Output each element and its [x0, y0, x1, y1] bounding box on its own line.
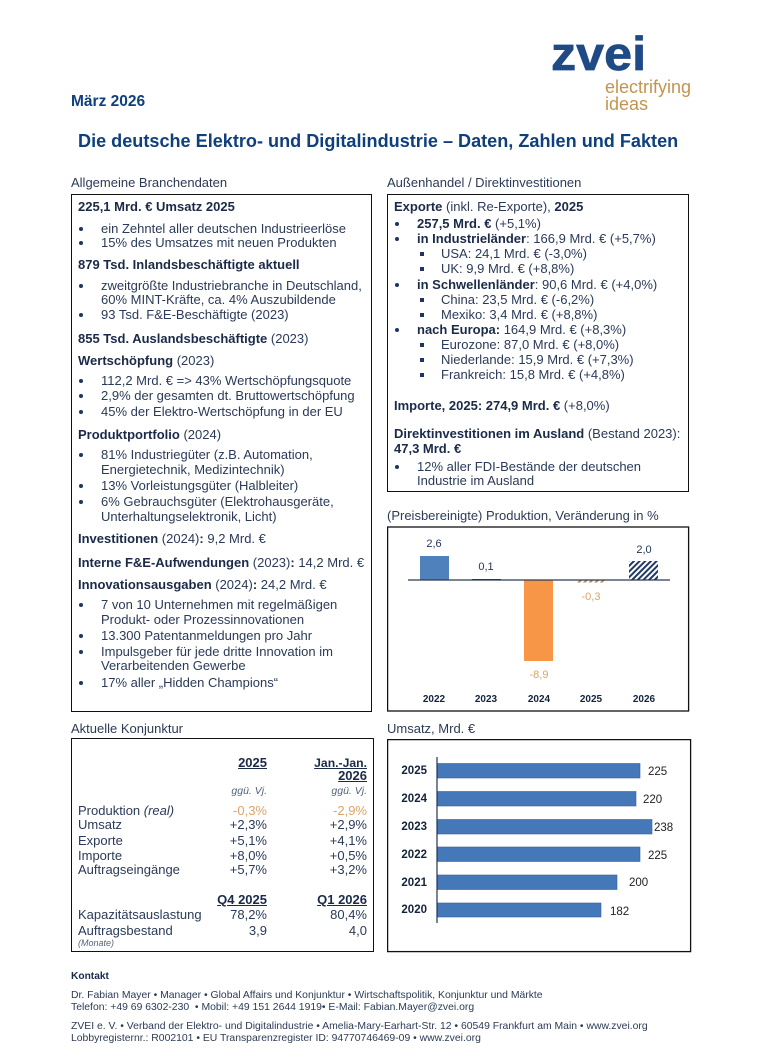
panel: Allgemeine Branchendaten: Energietechnik, Medizintechnik) [101, 462, 285, 477]
date: März 2026 [71, 93, 145, 110]
panel: Aktuelle Konjunktur: Exporte [78, 833, 123, 848]
bar chart: Umsatz: 2023 [401, 821, 427, 833]
panel: Aktuelle Konjunktur: +4,1% [330, 833, 367, 848]
bar chart: Produktion: 2024 [528, 694, 551, 705]
panel: Außenhandel / Direktinvestitionen: in Industrieländer: 166,9 Mrd. € (+5,7%) [417, 231, 656, 246]
panel: Aktuelle Konjunktur: 3,9 [249, 923, 267, 938]
panel: Allgemeine Branchendaten: 879 Tsd. Inlandsbeschäftigte aktuell [78, 257, 300, 272]
panel: Allgemeine Branchendaten: Investitionen (2024): 9,2 Mrd. € [78, 531, 266, 546]
bar chart: Produktion [387, 526, 690, 712]
panel: Außenhandel / Direktinvestitionen: 47,3 Mrd. € [394, 441, 461, 456]
bar chart: Produktion: 0,1 [478, 561, 494, 573]
bar chart: Produktion: 2,0 [636, 544, 652, 556]
panel: Aktuelle Konjunktur: Auftragsbestand [78, 923, 173, 938]
panel: Allgemeine Branchendaten: 13.300 Patentanmeldungen pro Jahr [101, 628, 312, 643]
bar chart: Produktion: -8,9 [530, 669, 548, 681]
heading: Außenhandel: Außenhandel / Direktinvestitionen [387, 175, 581, 190]
panel: Allgemeine Branchendaten: 7 von 10 Unternehmen mit regelmäßigen [101, 597, 337, 612]
heading: Allgemeine Branchendaten: Allgemeine Branchendaten [71, 175, 227, 190]
logo [551, 27, 691, 114]
bar chart: Umsatz: 220 [643, 794, 662, 806]
panel: Allgemeine Branchendaten: 93 Tsd. F&E-Beschäftigte (2023) [101, 307, 289, 322]
heading: Umsatz: Umsatz, Mrd. € [387, 721, 475, 736]
contact block: Telefon: +49 69 6302-230 • Mobil: +49 151 2644 1919• E-Mail: Fabian.Mayer@zvei.org [71, 1002, 474, 1013]
panel: Aktuelle Konjunktur: 2025 [238, 755, 267, 770]
bar chart: Produktion: -0,3 [582, 591, 600, 603]
bar chart: Umsatz: 200 [629, 877, 648, 889]
contact block: Dr. Fabian Mayer • Manager • Global Affairs und Konjunktur • Wirtschaftspolitik, Konjunktur und Märkte [71, 990, 543, 1001]
panel: Aktuelle Konjunktur: Q1 2026 [317, 892, 367, 907]
panel: Aktuelle Konjunktur: (Monate) [78, 938, 114, 948]
panel: Außenhandel / Direktinvestitionen: Eurozone: 87,0 Mrd. € (+8,0%) [441, 337, 619, 352]
bar chart: Umsatz: 182 [610, 906, 629, 918]
panel: Außenhandel / Direktinvestitionen: UK: 9,9 Mrd. € (+8,8%) [441, 261, 574, 276]
panel: Allgemeine Branchendaten: Produktportfolio (2024) [78, 427, 221, 442]
bar chart: Umsatz: 2022 [401, 849, 427, 861]
bar chart: Umsatz: 238 [654, 822, 673, 834]
panel: Aktuelle Konjunktur [71, 738, 374, 952]
panel: Allgemeine Branchendaten: Interne F&E-Aufwendungen (2023): 14,2 Mrd. € [78, 555, 364, 570]
bar chart: Umsatz: 2020 [401, 904, 427, 916]
bar chart: Produktion: 2026 [633, 694, 656, 705]
bar: 2022 [420, 556, 449, 580]
bar: 2025 [576, 580, 606, 582]
panel: Allgemeine Branchendaten: Unterhaltungselektronik, Licht) [101, 509, 277, 524]
contact block: Lobbyregisternr.: R002101 • EU Transparenzregister ID: 94770746469-09 • www.zvei.org [71, 1033, 481, 1044]
panel: Aktuelle Konjunktur: 2026 [338, 768, 367, 783]
panel: Allgemeine Branchendaten: 81% Industriegüter (z.B. Automation, [101, 447, 313, 462]
panel: Aktuelle Konjunktur: Importe [78, 848, 122, 863]
bar chart: Umsatz [387, 739, 692, 952]
panel: Aktuelle Konjunktur: 4,0 [349, 923, 367, 938]
logo: ideas [605, 94, 648, 114]
panel: Außenhandel / Direktinvestitionen: Industrie im Ausland [417, 473, 534, 488]
panel: Aktuelle Konjunktur: +8,0% [230, 848, 267, 863]
heading: Aktuelle Konjunktur: Aktuelle Konjunktur [71, 721, 183, 736]
panel: Allgemeine Branchendaten: Impulsgeber für jede dritte Innovation im [101, 644, 333, 659]
panel: Aktuelle Konjunktur: 80,4% [330, 907, 367, 922]
bar chart: Produktion: 2023 [475, 694, 498, 705]
contact block: ZVEI e. V. • Verband der Elektro- und Digitalindustrie • Amelia-Mary-Earhart-Str. 12 • 60549 Frankfurt am Main • www.zvei.org [71, 1021, 648, 1032]
bar: 2024 [524, 580, 553, 661]
bar chart: Produktion: 2,6 [426, 538, 442, 550]
panel: Außenhandel / Direktinvestitionen: Exporte (inkl. Re-Exporte), 2025 [394, 199, 583, 214]
bar: 2026 [629, 561, 658, 580]
panel: Außenhandel / Direktinvestitionen: in Schwellenländer: 90,6 Mrd. € (+4,0%) [417, 277, 657, 292]
panel: Allgemeine Branchendaten: 60% MINT-Kräfte, ca. 4% Auszubildende [101, 292, 336, 307]
panel: Allgemeine Branchendaten [71, 194, 372, 712]
contact heading: Kontakt [71, 971, 109, 982]
panel: Aktuelle Konjunktur: Jan.-Jan. [314, 756, 367, 770]
panel: Aktuelle Konjunktur: +3,2% [330, 862, 367, 877]
bar chart: Produktion: 2022 [423, 694, 446, 705]
panel: Außenhandel / Direktinvestitionen: 257,5 Mrd. € (+5,1%) [417, 216, 541, 231]
panel: Allgemeine Branchendaten: Wertschöpfung (2023) [78, 353, 214, 368]
heading: Produktion: (Preisbereinigte) Produktion, Veränderung in % [387, 508, 659, 523]
panel: Allgemeine Branchendaten: 225,1 Mrd. € Umsatz 2025 [78, 199, 235, 214]
bar: 2023 [472, 579, 501, 580]
panel: Allgemeine Branchendaten: 6% Gebrauchsgüter (Elektrohausgeräte, [101, 494, 334, 509]
panel: Allgemeine Branchendaten: 112,2 Mrd. € => 43% Wertschöpfungsquote [101, 373, 351, 388]
panel: Außenhandel / Direktinvestitionen: USA: 24,1 Mrd. € (-3,0%) [441, 246, 587, 261]
panel: Allgemeine Branchendaten: 15% des Umsatzes mit neuen Produkten [101, 235, 337, 250]
panel: Allgemeine Branchendaten: 17% aller „Hidden Champions“ [101, 675, 278, 690]
panel: Allgemeine Branchendaten: Verarbeitenden Gewerbe [101, 658, 246, 673]
logo: electrifying [605, 77, 691, 97]
panel: Aktuelle Konjunktur: +5,1% [230, 833, 267, 848]
panel: Außenhandel / Direktinvestitionen: Frankreich: 15,8 Mrd. € (+4,8%) [441, 367, 625, 382]
bar chart: Umsatz: 225 [648, 766, 667, 778]
panel: Aktuelle Konjunktur: Produktion (real) [78, 803, 174, 818]
panel: Aktuelle Konjunktur: -2,9% [333, 803, 367, 818]
panel: Aktuelle Konjunktur: +5,7% [230, 862, 267, 877]
panel: Außenhandel / Direktinvestitionen: Direktinvestitionen im Ausland (Bestand 2023): [394, 426, 680, 441]
panel: Aktuelle Konjunktur: ggü. Vj. [331, 785, 367, 797]
panel: Außenhandel / Direktinvestitionen [387, 194, 689, 492]
title: Die deutsche Elektro- und Digitalindustrie – Daten, Zahlen und Fakten [78, 131, 678, 151]
panel: Allgemeine Branchendaten: 2,9% der gesamten dt. Bruttowertschöpfung [101, 388, 355, 403]
panel: Aktuelle Konjunktur: -0,3% [233, 803, 267, 818]
bar chart: Umsatz: 2024 [401, 793, 428, 805]
panel: Aktuelle Konjunktur: Kapazitätsauslastung [78, 907, 202, 922]
panel: Aktuelle Konjunktur: +0,5% [330, 848, 367, 863]
panel: Allgemeine Branchendaten: zweitgrößte Industriebranche in Deutschland, [101, 278, 362, 293]
panel: Außenhandel / Direktinvestitionen: Niederlande: 15,9 Mrd. € (+7,3%) [441, 352, 634, 367]
panel: Außenhandel / Direktinvestitionen: Importe, 2025: 274,9 Mrd. € (+8,0%) [394, 398, 610, 413]
panel: Außenhandel / Direktinvestitionen: Mexiko: 3,4 Mrd. € (+8,8%) [441, 307, 597, 322]
contact block [71, 990, 648, 1044]
panel: Aktuelle Konjunktur: +2,9% [330, 817, 367, 832]
panel: Allgemeine Branchendaten: Produkt- oder Prozessinnovationen [101, 612, 304, 627]
panel: Außenhandel / Direktinvestitionen: 12% aller FDI-Bestände der deutschen [417, 459, 641, 474]
panel: Allgemeine Branchendaten: Innovationsausgaben (2024): 24,2 Mrd. € [78, 577, 327, 592]
bar chart: Umsatz: 225 [648, 850, 667, 862]
panel: Aktuelle Konjunktur: ggü. Vj. [231, 785, 267, 797]
bar chart: Umsatz: 2021 [401, 877, 428, 889]
panel: Allgemeine Branchendaten: ein Zehntel aller deutschen Industrieerlöse [101, 221, 346, 236]
logo: zvei [551, 27, 646, 80]
panel: Allgemeine Branchendaten: 855 Tsd. Auslandsbeschäftigte (2023) [78, 331, 308, 346]
panel: Allgemeine Branchendaten: 13% Vorleistungsgüter (Halbleiter) [101, 478, 298, 493]
panel: Außenhandel / Direktinvestitionen: nach Europa: 164,9 Mrd. € (+8,3%) [417, 322, 626, 337]
panel: Aktuelle Konjunktur: Q4 2025 [217, 892, 267, 907]
bar chart: Umsatz: 2025 [401, 765, 428, 777]
panel: Allgemeine Branchendaten: 45% der Elektro-Wertschöpfung in der EU [101, 404, 343, 419]
panel: Aktuelle Konjunktur: +2,3% [230, 817, 267, 832]
panel: Aktuelle Konjunktur: Umsatz [78, 817, 122, 832]
bar chart: Produktion: 2025 [580, 694, 603, 705]
panel: Außenhandel / Direktinvestitionen: China: 23,5 Mrd. € (-6,2%) [441, 292, 594, 307]
panel: Aktuelle Konjunktur: Auftragseingänge [78, 862, 180, 877]
panel: Aktuelle Konjunktur: 78,2% [230, 907, 267, 922]
